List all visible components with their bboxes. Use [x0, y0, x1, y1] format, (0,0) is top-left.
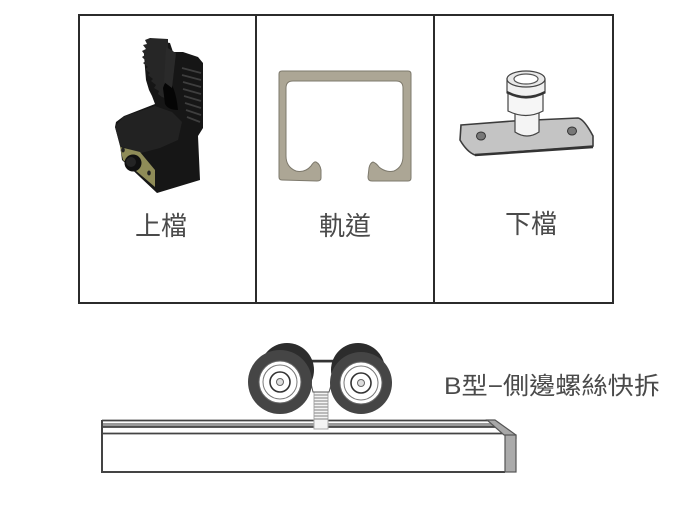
label: track: 軌道	[319, 211, 371, 241]
panel: parts table	[79, 15, 613, 303]
label: product type: B型−側邊螺絲快拆	[444, 373, 660, 400]
icon: lower stop plate	[460, 71, 593, 155]
label: lower stop: 下檔	[505, 209, 557, 239]
illustration: rail bar	[102, 420, 516, 472]
icon: upper stop bracket	[115, 38, 203, 193]
icon: track cross-section	[279, 71, 411, 181]
illustration: roller carriage	[248, 343, 392, 429]
label: upper stop: 上檔	[135, 211, 187, 241]
